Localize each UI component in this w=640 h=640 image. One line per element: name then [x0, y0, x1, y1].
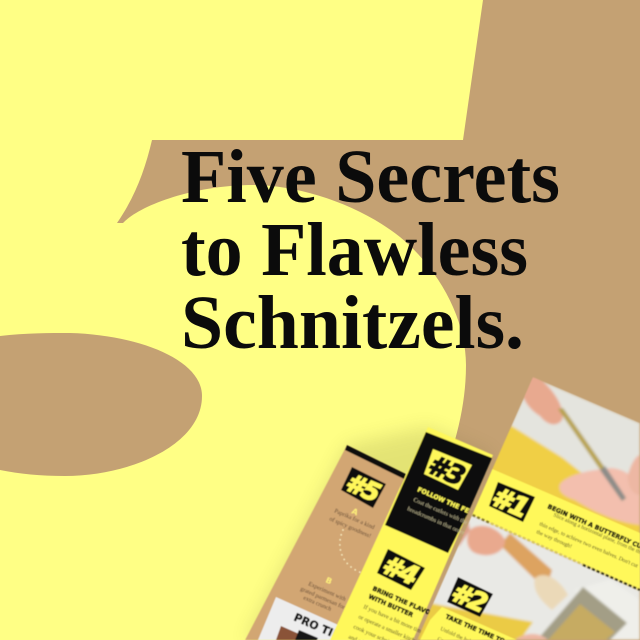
page: #5 [245, 445, 406, 640]
pro tip panel [258, 597, 345, 640]
step A [329, 508, 376, 538]
step B: grated parmesan for [299, 585, 346, 611]
badge #5: #5 [342, 468, 385, 508]
document shadow [245, 427, 493, 640]
section #4 text: If you have a bit more time [362, 603, 425, 636]
photo: rolling pin and mallet [417, 513, 640, 640]
section #3 text: FOLLOW THE FE [416, 486, 470, 515]
badge #4: #4 [378, 550, 423, 592]
step A: of spicy goodness! [328, 515, 372, 540]
band #2 [420, 577, 517, 640]
title: to Flawless [181, 208, 528, 292]
step A: Paprika for a kind [333, 507, 376, 531]
infographic pages preview [245, 377, 640, 640]
step B: B [324, 576, 333, 586]
title: Five Secrets [181, 135, 560, 219]
section #4 text [347, 585, 431, 640]
section #1 text: thin edge, to achieve two even halves. Don't cut [538, 521, 639, 570]
section #4 text: WITH BUTTER [367, 593, 414, 619]
badge #1: #1 [487, 482, 534, 525]
step A: A [350, 507, 360, 518]
step B: extra crunch [302, 595, 332, 613]
photo: butterfly cut [490, 377, 640, 540]
band #1 [468, 468, 640, 590]
decorative numeral 5: lower blob [0, 333, 202, 476]
section #4 text: BRING THE FLAVO [371, 585, 431, 617]
section #3 text: breadcrumbs in that order [406, 506, 465, 536]
black panel [385, 432, 492, 553]
title: Schnitzels. [181, 281, 524, 365]
page: #1 and #2 [417, 377, 640, 640]
badge #2: #2 [447, 578, 492, 620]
badge #3: #3 [423, 450, 470, 493]
dotted connector [340, 530, 362, 573]
section #1 text [535, 503, 640, 570]
step B: Experiment with [307, 581, 346, 603]
page: #3 and #4 [330, 427, 493, 640]
section #3 text [406, 486, 470, 536]
title [181, 135, 560, 365]
step B [299, 576, 346, 613]
section #3 text: Coat the cutlets with the [412, 497, 468, 526]
section #1 text: the way through! [535, 529, 573, 550]
